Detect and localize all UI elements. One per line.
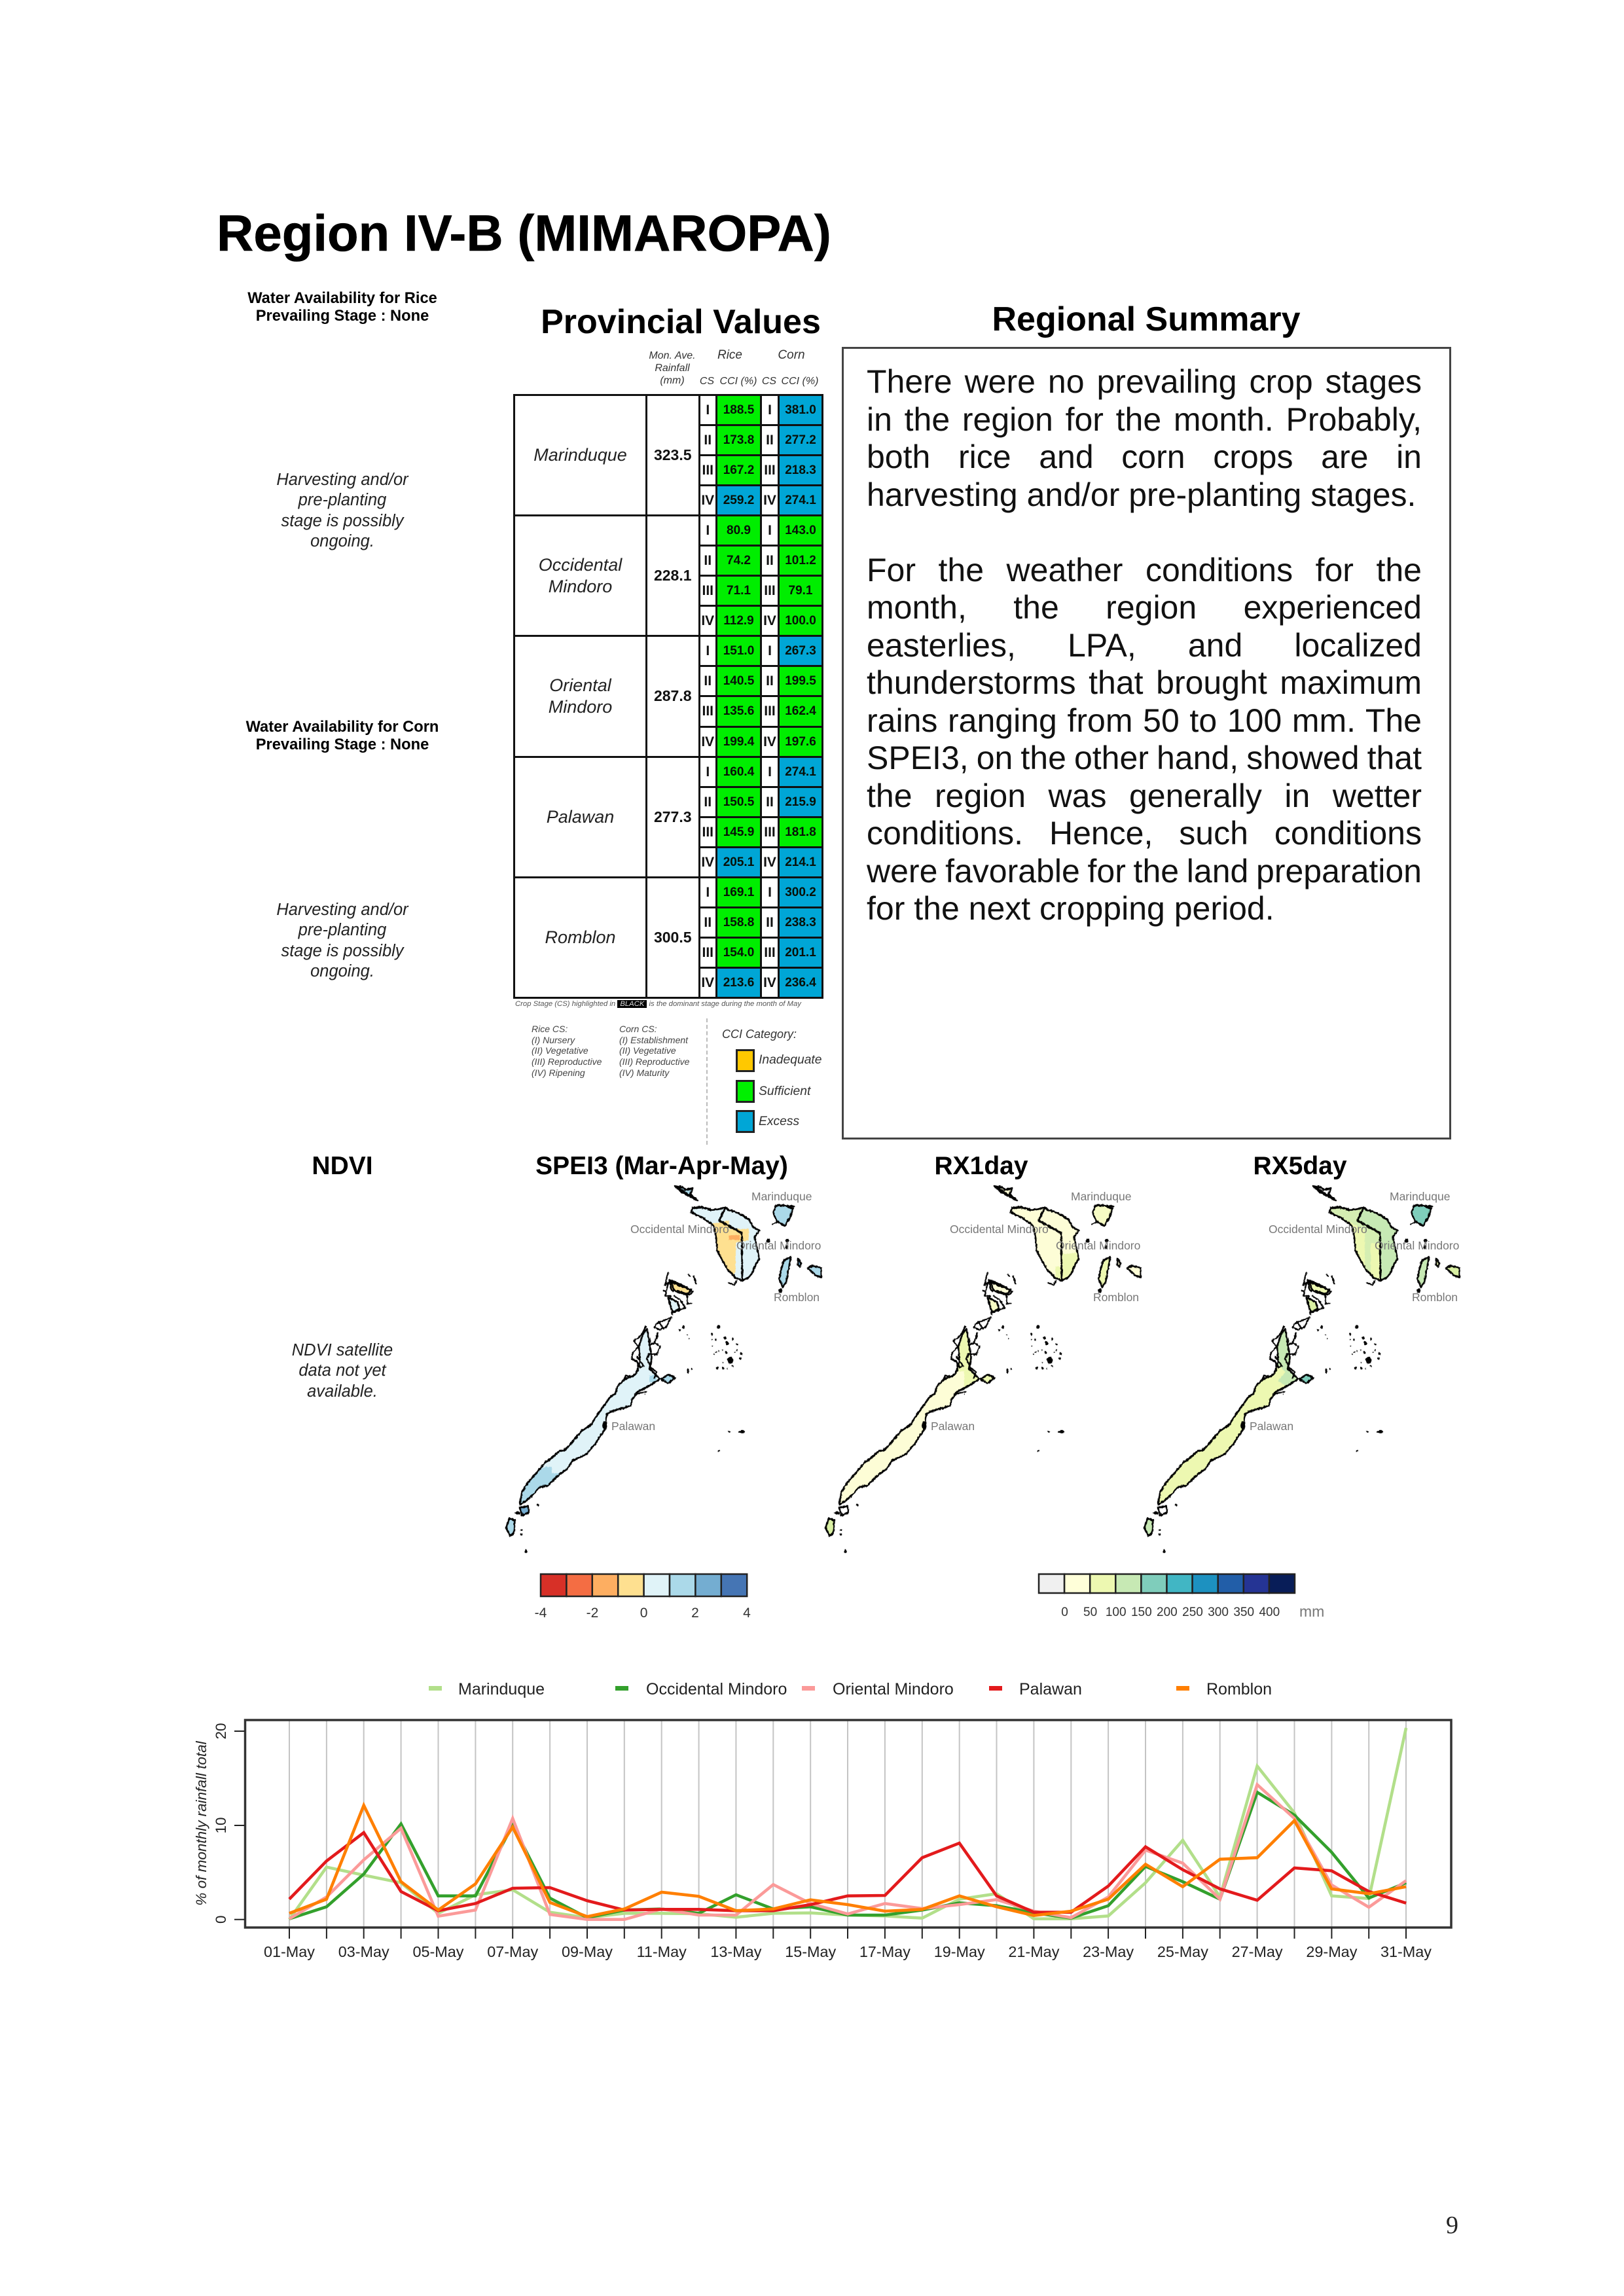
- provincial values table: 158.8: [723, 916, 754, 929]
- provincial values table: II: [766, 673, 774, 689]
- provincial values table: 188.5: [723, 403, 754, 417]
- provincial values table: 151.0: [723, 644, 754, 658]
- provincial values table: III: [702, 945, 713, 960]
- provincial values table: III: [702, 825, 713, 840]
- NDVI note: [292, 1341, 393, 1401]
- map shapes: RX5day provinces: [1144, 1186, 1460, 1553]
- provincial values table: 173.8: [723, 433, 754, 447]
- provincial values table: 274.1: [785, 765, 816, 779]
- chart legend: [429, 1680, 1272, 1698]
- x axis labels: [264, 1943, 1432, 1960]
- rainfall colour legend: [1039, 1574, 1324, 1620]
- provincial values table: III: [702, 463, 713, 478]
- regional summary text block: rains ranging from 50 to 100 mm. The: [867, 702, 1422, 738]
- series: Occidental Mindoro: [289, 1792, 1406, 1919]
- table column headers: Corn: [778, 348, 805, 362]
- provincial values table: II: [766, 915, 774, 930]
- provincial values table: 79.1: [788, 584, 812, 598]
- provincial values table: 238.3: [785, 916, 816, 929]
- x axis labels: 11-May: [637, 1943, 687, 1960]
- provincial values table: I: [706, 403, 710, 418]
- province labels: SPEI3 map: Marinduque: [751, 1190, 812, 1203]
- NDVI note: data not yet: [298, 1361, 386, 1380]
- province labels: RX5day map: [1250, 1190, 1459, 1433]
- SPEI colour legend: [535, 1574, 751, 1621]
- corn crop stage legend: (III) Reproductive: [619, 1056, 689, 1067]
- provincial values table: Mindoro: [549, 697, 612, 717]
- corn stage note: [276, 901, 408, 980]
- rice crop stage legend: (I) Nursery: [532, 1035, 575, 1045]
- regional summary heading: Regional Summary: [992, 300, 1301, 338]
- RX1day heading: RX1day: [934, 1152, 1028, 1180]
- province labels: RX1day map: Romblon: [1093, 1291, 1139, 1304]
- provincial values table: 323.5: [654, 446, 692, 463]
- label: sufficient: Sufficient: [759, 1085, 810, 1098]
- provincial values table: 154.0: [723, 946, 754, 960]
- regional summary text block: thunderstorms that brought maximum: [867, 664, 1422, 701]
- rice crop stage legend: (IV) Ripening: [532, 1067, 585, 1078]
- provincial values table: 287.8: [654, 687, 692, 704]
- provincial values table: 197.6: [785, 735, 816, 749]
- rainfall colour legend: 100: [1106, 1605, 1127, 1619]
- chart legend: Marinduque: [458, 1680, 545, 1698]
- province labels: RX1day map: Palawan: [931, 1420, 975, 1433]
- regional summary text block: harvesting and/or pre-planting stages.: [867, 476, 1416, 513]
- y axis labels: 10: [213, 1817, 229, 1834]
- provincial values table: 199.4: [723, 735, 754, 749]
- provincial values table: III: [702, 583, 713, 598]
- provincial values table: II: [766, 795, 774, 810]
- corn crop stage legend: (I) Establishment: [619, 1035, 688, 1045]
- rainfall colour legend: 200: [1157, 1605, 1178, 1619]
- series: Romblon: [289, 1805, 1406, 1916]
- table column headers: [649, 348, 818, 387]
- provincial values table: 218.3: [785, 463, 816, 477]
- provincial values table: I: [706, 523, 710, 538]
- provincial values table: 167.2: [723, 463, 754, 477]
- water availability for corn heading: [246, 719, 439, 753]
- regional summary text block: both rice and corn crops are in: [867, 439, 1422, 475]
- provincial values table: 169.1: [723, 886, 754, 899]
- provincial values table: III: [764, 945, 776, 960]
- provincial values table: 205.1: [723, 855, 754, 869]
- provincial values table: 100.0: [785, 614, 816, 628]
- water availability for rice heading: Prevailing Stage : None: [256, 308, 429, 325]
- RX5day map: [1144, 1186, 1460, 1553]
- x axis labels: 29-May: [1306, 1943, 1358, 1960]
- provincial values table: 135.6: [723, 704, 754, 718]
- provincial values table: 143.0: [785, 524, 816, 537]
- provincial values table: I: [768, 643, 772, 658]
- x axis labels: 01-May: [264, 1943, 315, 1960]
- provincial values table: I: [768, 885, 772, 900]
- provincial values table: Palawan: [547, 807, 614, 827]
- x axis labels: 23-May: [1083, 1943, 1134, 1960]
- rice crop stage legend: [532, 1024, 602, 1078]
- provincial values table: IV: [701, 855, 714, 870]
- table column headers: Rainfall: [655, 363, 690, 374]
- rainfall colour legend: 50: [1083, 1605, 1097, 1619]
- rice crop stage legend: Rice CS:: [532, 1024, 568, 1034]
- province labels: RX5day map: Palawan: [1250, 1420, 1293, 1433]
- provincial values table: 381.0: [785, 403, 816, 417]
- y axis labels: 0: [213, 1915, 229, 1924]
- series: Oriental Mindoro: [289, 1785, 1406, 1920]
- SPEI3 map: [506, 1186, 821, 1553]
- provincial values table: IV: [701, 975, 714, 990]
- regional summary text block: month, the region experienced: [867, 589, 1422, 626]
- rice stage note: stage is possibly: [281, 512, 404, 530]
- province labels: RX1day map: Occidental Mindoro: [950, 1223, 1049, 1236]
- NDVI note: NDVI satellite: [292, 1341, 393, 1359]
- provincial values table: IV: [701, 493, 714, 508]
- series: Marinduque: [289, 1728, 1406, 1920]
- rice stage note: ongoing.: [310, 532, 374, 550]
- regional summary text block: [867, 363, 1422, 927]
- corn stage note: ongoing.: [310, 962, 374, 980]
- x axis labels: 21-May: [1008, 1943, 1060, 1960]
- rainfall colour legend: 350: [1233, 1605, 1254, 1619]
- provincial values table: Occidental: [539, 555, 622, 575]
- provincial values table: [513, 394, 823, 999]
- regional summary text block: the region was generally in wetter: [867, 778, 1422, 814]
- x axis labels: 09-May: [562, 1943, 613, 1960]
- x axis labels: 05-May: [412, 1943, 464, 1960]
- label: excess: Excess: [759, 1115, 799, 1128]
- table column headers: Rice: [717, 348, 742, 362]
- provincial values table: IV: [763, 493, 776, 508]
- provincial values table: Mindoro: [549, 577, 612, 596]
- x axis labels: 07-May: [487, 1943, 539, 1960]
- province labels: SPEI3 map: Oriental Mindoro: [736, 1239, 821, 1252]
- province labels: RX5day map: Marinduque: [1390, 1190, 1450, 1203]
- provincial values table: III: [764, 583, 776, 598]
- provincial values table: I: [706, 643, 710, 658]
- rice stage note: Harvesting and/or: [276, 471, 408, 489]
- SPEI colour legend: -4: [535, 1605, 547, 1621]
- provincial values table: 150.5: [723, 795, 754, 809]
- provincial values table: 277.3: [654, 808, 692, 825]
- rainfall colour legend: 250: [1182, 1605, 1203, 1619]
- provincial values table: 80.9: [727, 524, 751, 537]
- provincial values table: 259.2: [723, 493, 754, 507]
- provincial values table: 162.4: [785, 704, 816, 718]
- page number: 9: [1446, 2212, 1458, 2239]
- provincial values table: 277.2: [785, 433, 816, 447]
- provincial values table: 199.5: [785, 674, 816, 688]
- provincial values table: II: [704, 915, 712, 930]
- provincial values table: III: [764, 825, 776, 840]
- corn crop stage legend: [619, 1024, 689, 1078]
- water availability for rice heading: [247, 290, 437, 325]
- SPEI colour legend: 4: [743, 1605, 751, 1621]
- provincial values table: IV: [763, 975, 776, 990]
- provincial values table: III: [702, 704, 713, 719]
- province labels: SPEI3 map: Occidental Mindoro: [630, 1223, 729, 1236]
- provincial values table: I: [768, 764, 772, 780]
- provincial values table: II: [766, 433, 774, 448]
- table footnote: Crop Stage (CS) highlighted in BLACK is the dominant stage during the month of May: [515, 1000, 801, 1008]
- chart legend: Oriental Mindoro: [833, 1680, 954, 1698]
- corn crop stage legend: Corn CS:: [619, 1024, 657, 1034]
- y axis title: % of monthly rainfall total: [193, 1740, 209, 1906]
- provincial values table: I: [706, 764, 710, 780]
- rainfall colour legend: 300: [1208, 1605, 1229, 1619]
- chart legend: Romblon: [1206, 1680, 1272, 1698]
- swatch: inadequate: [736, 1049, 755, 1072]
- provincial values heading: Provincial Values: [541, 303, 821, 341]
- province labels: RX5day map: Romblon: [1412, 1291, 1458, 1304]
- water availability for corn heading: Water Availability for Corn: [246, 719, 439, 736]
- provincial values table: 300.5: [654, 929, 692, 946]
- province labels: RX1day map: Marinduque: [1071, 1190, 1131, 1203]
- provincial values table: II: [766, 553, 774, 568]
- corn crop stage legend: (II) Vegetative: [619, 1045, 676, 1056]
- provincial values table: I: [768, 523, 772, 538]
- province labels: SPEI3 map: [611, 1190, 821, 1433]
- provincial values table: Marinduque: [533, 445, 627, 465]
- province labels: RX1day map: Oriental Mindoro: [1056, 1239, 1140, 1252]
- label: inadequate: Inadequate: [759, 1053, 822, 1067]
- provincial values table: 215.9: [785, 795, 816, 809]
- provincial values table: 71.1: [727, 584, 751, 598]
- table column headers: Mon. Ave.: [649, 350, 696, 361]
- chart legend: Palawan: [1019, 1680, 1082, 1698]
- provincial values table: 112.9: [723, 614, 754, 628]
- SPEI colour legend: 0: [640, 1605, 647, 1621]
- provincial values table: IV: [763, 855, 776, 870]
- x axis labels: 27-May: [1232, 1943, 1283, 1960]
- provincial values table: 74.2: [727, 554, 751, 567]
- table column headers: CS: [700, 376, 714, 387]
- SPEI colour legend: -2: [586, 1605, 598, 1621]
- provincial values table: 101.2: [785, 554, 816, 567]
- provincial values table: IV: [763, 734, 776, 749]
- x axis labels: 19-May: [934, 1943, 985, 1960]
- corn stage note: pre-planting: [298, 921, 386, 939]
- table column headers: (mm): [660, 375, 685, 386]
- x axis labels: 13-May: [710, 1943, 762, 1960]
- title: Region IV-B (MIMAROPA): [217, 204, 831, 262]
- rainfall colour legend: 400: [1259, 1605, 1280, 1619]
- regional summary text block: in the region for the month. Probably,: [867, 401, 1422, 437]
- x axis labels: 03-May: [338, 1943, 389, 1960]
- chart legend: Occidental Mindoro: [646, 1680, 787, 1698]
- regional summary text block: were favorable for the land preparation: [867, 852, 1422, 889]
- provincial values table: 181.8: [785, 825, 816, 839]
- provincial values table: 300.2: [785, 886, 816, 899]
- SPEI3 heading: SPEI3 (Mar-Apr-May): [535, 1152, 788, 1180]
- y axis labels: 20: [213, 1723, 229, 1740]
- provincial values table: 228.1: [654, 567, 692, 584]
- provincial values table: III: [764, 463, 776, 478]
- RX1day map: [825, 1186, 1141, 1553]
- panel: regional summary text: [842, 347, 1451, 1139]
- province labels: RX5day map: Oriental Mindoro: [1375, 1239, 1459, 1252]
- x axis labels: 31-May: [1380, 1943, 1432, 1960]
- swatch: sufficient: [736, 1080, 755, 1103]
- provincial values table: 201.1: [785, 946, 816, 960]
- provincial values table: I: [706, 885, 710, 900]
- provincial values table: Romblon: [545, 927, 616, 947]
- table column headers: CS: [762, 376, 776, 387]
- rice stage note: pre-planting: [298, 491, 386, 509]
- NDVI heading: NDVI: [312, 1152, 373, 1180]
- corn crop stage legend: (IV) Maturity: [619, 1067, 669, 1078]
- rice crop stage legend: (II) Vegetative: [532, 1045, 588, 1056]
- rainfall colour legend: 0: [1061, 1605, 1068, 1619]
- table column headers: CCI (%): [720, 376, 757, 387]
- province labels: RX1day map: [931, 1190, 1140, 1433]
- x axis labels: 17-May: [859, 1943, 911, 1960]
- province labels: SPEI3 map: Romblon: [774, 1291, 820, 1304]
- provincial values table: Oriental: [549, 675, 611, 695]
- provincial values table: III: [764, 704, 776, 719]
- rice crop stage legend: (III) Reproductive: [532, 1056, 602, 1067]
- provincial values table: I: [768, 403, 772, 418]
- province labels: RX5day map: Occidental Mindoro: [1269, 1223, 1367, 1236]
- series: Palawan: [289, 1833, 1406, 1912]
- regional summary text block: There were no prevailing crop stages: [867, 363, 1422, 400]
- provincial values table: II: [704, 553, 712, 568]
- provincial values table: 236.4: [785, 976, 816, 990]
- CCI category legend: CCI Category:: [722, 1028, 797, 1041]
- SPEI colour legend: 2: [691, 1605, 699, 1621]
- RX5day heading: RX5day: [1253, 1152, 1347, 1180]
- y axis labels: [213, 1723, 229, 1924]
- provincial values table: II: [704, 795, 712, 810]
- map shapes: RX1day provinces: [825, 1186, 1141, 1553]
- x axis labels: 25-May: [1157, 1943, 1208, 1960]
- map shapes: SPEI3 provinces: [506, 1186, 821, 1553]
- provincial values table: IV: [701, 613, 714, 628]
- swatch: excess: [736, 1110, 755, 1133]
- provincial values table: 214.1: [785, 855, 816, 869]
- x axis labels: 15-May: [785, 1943, 837, 1960]
- rainfall colour legend: 150: [1131, 1605, 1152, 1619]
- regional summary text block: SPEI3, on the other hand, showed that: [867, 740, 1422, 776]
- provincial values table: 274.1: [785, 493, 816, 507]
- provincial values table: 145.9: [723, 825, 754, 839]
- water availability for rice heading: Water Availability for Rice: [247, 290, 437, 307]
- province labels: SPEI3 map: Palawan: [611, 1420, 655, 1433]
- provincial values table: 140.5: [723, 674, 754, 688]
- provincial values table: 160.4: [723, 765, 754, 779]
- provincial values table: 213.6: [723, 976, 754, 990]
- provincial values table: II: [704, 673, 712, 689]
- regional summary text block: For the weather conditions for the: [867, 551, 1422, 588]
- provincial values table: 267.3: [785, 644, 816, 658]
- water availability for corn heading: Prevailing Stage : None: [256, 736, 429, 753]
- regional summary text block: conditions. Hence, such conditions: [867, 815, 1422, 852]
- regional summary text block: easterlies, LPA, and localized: [867, 627, 1422, 664]
- regional summary text block: for the next cropping period.: [867, 890, 1274, 927]
- provincial values table: II: [704, 433, 712, 448]
- provincial values table: IV: [701, 734, 714, 749]
- corn stage note: Harvesting and/or: [276, 901, 408, 919]
- line chart: daily rainfall share: [193, 1720, 1451, 1960]
- corn stage note: stage is possibly: [281, 942, 404, 960]
- provincial values table: IV: [763, 613, 776, 628]
- chart frame: [245, 1720, 1451, 1928]
- rainfall colour legend: mm: [1299, 1603, 1324, 1620]
- series lines: [289, 1728, 1406, 1920]
- table column headers: CCI (%): [782, 376, 818, 387]
- NDVI note: available.: [307, 1382, 378, 1401]
- rice stage note: [276, 471, 408, 550]
